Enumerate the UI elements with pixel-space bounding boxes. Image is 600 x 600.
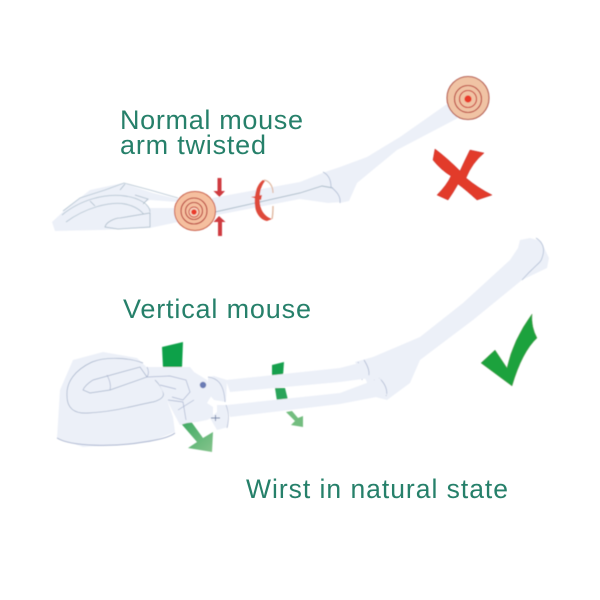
red cross mark <box>433 149 492 200</box>
green arrow behind forearm <box>272 362 303 427</box>
title: normal mouse arm twisted <box>120 105 303 160</box>
green arrow behind hand <box>162 342 213 452</box>
twist rotation arrow <box>251 180 273 221</box>
small wrist movement arrows <box>211 415 220 421</box>
upper arm bone, natural arm <box>355 238 549 400</box>
caption: wrist in natural state: Wirst in natural state <box>246 474 508 504</box>
compression arrow up <box>214 216 226 236</box>
vertical mouse body <box>57 352 175 447</box>
heading: vertical mouse: Vertical mouse <box>123 294 311 324</box>
hand and normal mouse <box>52 183 178 231</box>
illustration: natural arm on vertical mouse <box>57 238 549 452</box>
forearm bones, twisted arm <box>212 172 342 216</box>
wrist pivot dot <box>200 382 206 388</box>
green check mark <box>481 314 537 386</box>
pain target at elbow <box>447 76 489 120</box>
compression arrow down <box>214 178 225 197</box>
title: normal mouse arm twisted: arm twisted <box>120 130 266 160</box>
hand skeleton <box>83 367 213 425</box>
upper arm bone, twisted arm <box>325 104 458 203</box>
title: normal mouse arm twisted: Normal mouse <box>120 105 303 135</box>
illustration: twisted arm on normal mouse <box>52 76 492 236</box>
forearm bones, natural arm <box>208 362 387 430</box>
pain target at wrist <box>174 192 216 230</box>
